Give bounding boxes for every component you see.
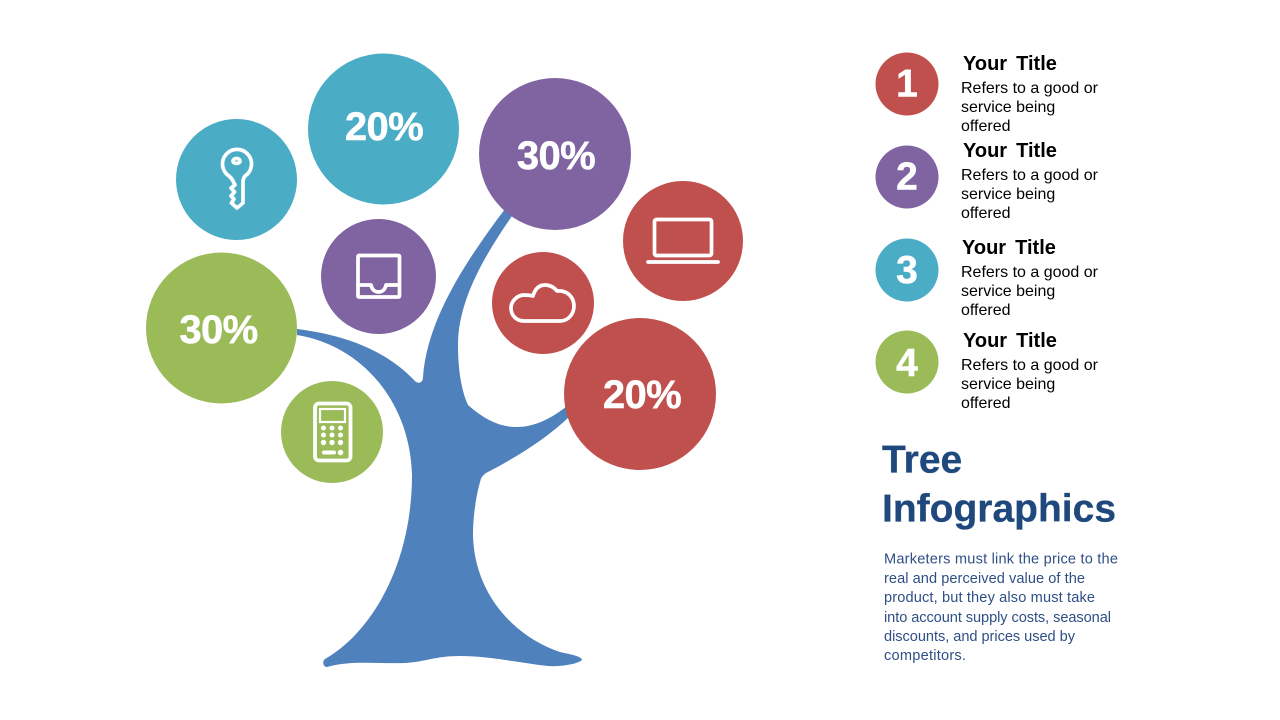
- body text: [884, 552, 1118, 664]
- circle: 30 percent purple: [479, 78, 631, 230]
- circle: key icon: [176, 119, 297, 240]
- icon: cloud: [511, 285, 574, 321]
- legend item 2: service being: [961, 186, 1055, 203]
- icon: calculator: [315, 404, 350, 460]
- body text: real and perceived value of the: [884, 571, 1085, 587]
- legend item 1: service being: [961, 99, 1055, 116]
- legend item 1: 1: [896, 62, 918, 106]
- circle: 30 percent green: [146, 252, 297, 404]
- circle: 20 percent red: [564, 318, 716, 470]
- heading: Tree: [882, 438, 962, 482]
- legend item 4: 4: [896, 342, 918, 385]
- circle: 20 percent blue: 20%: [345, 105, 423, 149]
- heading: Infographics: [882, 488, 1116, 530]
- body text: discounts, and prices used by: [884, 629, 1076, 645]
- circle: 30 percent purple: 30%: [517, 134, 595, 178]
- legend item 4: Refers to a good or: [961, 357, 1099, 374]
- icon: laptop: [648, 220, 718, 262]
- circle: calculator icon: [281, 381, 383, 483]
- body text: competitors.: [884, 648, 966, 664]
- legend item 3: [876, 237, 1099, 319]
- legend item 4: [876, 330, 1099, 412]
- legend item 3: 3: [896, 249, 918, 292]
- legend item 1: [876, 52, 1099, 135]
- legend item 1: offered: [961, 118, 1011, 135]
- heading: [882, 438, 1116, 530]
- body text: Marketers must link the price to the: [884, 552, 1118, 568]
- legend item 2: [876, 140, 1099, 222]
- icon: inbox tray: [358, 256, 400, 297]
- body text: into account supply costs, seasonal: [884, 610, 1111, 626]
- legend item 4: Your Title: [963, 330, 1057, 352]
- legend item 2: Your Title: [963, 140, 1057, 162]
- legend item 3: Your Title: [962, 237, 1056, 259]
- legend item 1: Refers to a good or: [961, 80, 1099, 97]
- legend item 4: service being: [961, 376, 1055, 393]
- body text: product, but they also must take: [884, 590, 1095, 606]
- legend item 4: offered: [961, 395, 1011, 412]
- legend item 2: offered: [961, 205, 1011, 222]
- circle: 20 percent blue: [308, 54, 459, 204]
- circle: laptop icon: [623, 181, 743, 301]
- legend item 1: Your Title: [963, 53, 1057, 75]
- circle: inbox icon: [321, 219, 436, 334]
- legend item 3: Refers to a good or: [961, 264, 1099, 281]
- legend item 2: 2: [896, 156, 918, 198]
- icon: key: [222, 149, 251, 208]
- legend item 3: service being: [961, 283, 1055, 300]
- circle: 20 percent red: 20%: [603, 373, 681, 417]
- circle: 30 percent green: 30%: [179, 308, 258, 352]
- legend item 2: Refers to a good or: [961, 167, 1099, 184]
- tree trunk and branches: [297, 209, 582, 667]
- circle: cloud icon: [492, 252, 594, 354]
- legend item 3: offered: [961, 302, 1011, 319]
